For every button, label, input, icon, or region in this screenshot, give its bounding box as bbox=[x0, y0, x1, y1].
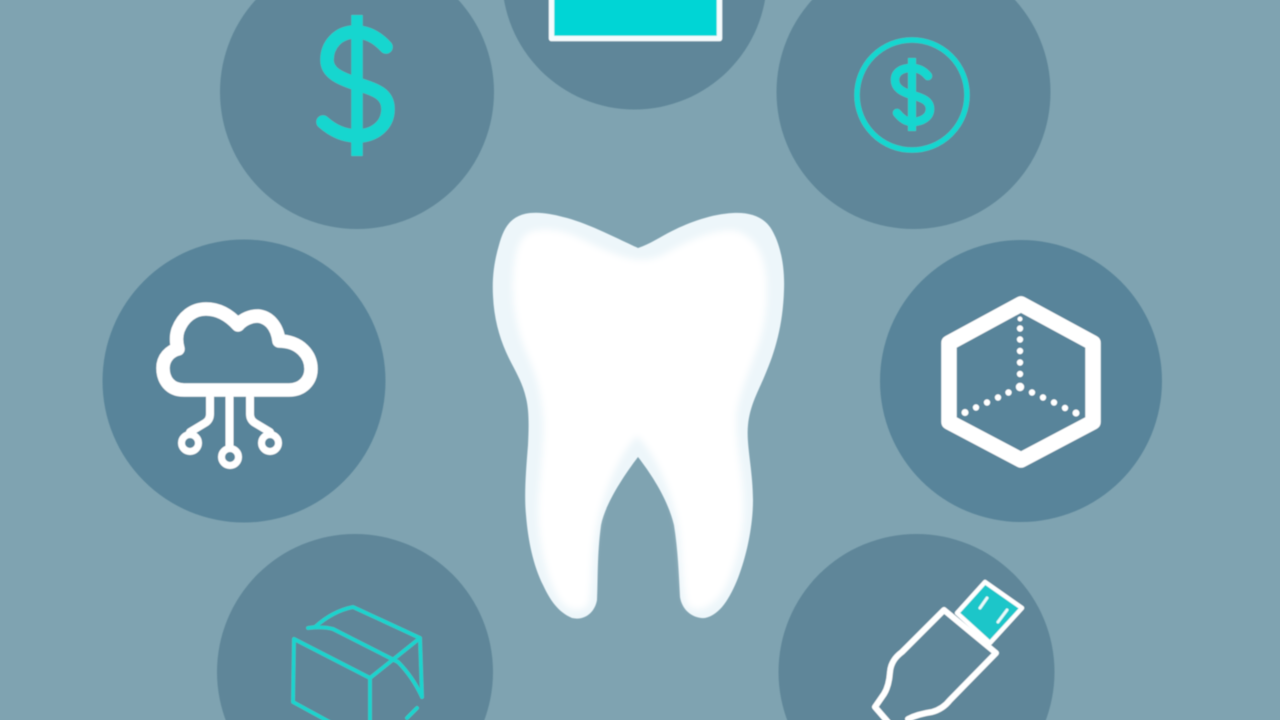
icon: USB connector tip bbox=[957, 582, 1022, 643]
icon circle: bottom right, USB plug bbox=[778, 534, 1054, 720]
icon: USB body bbox=[875, 610, 996, 720]
tooth inner highlight bbox=[513, 230, 767, 610]
icon: network lines bbox=[190, 392, 270, 448]
icon circle: top left, dollar sign bbox=[220, 0, 494, 229]
icon: cloud outline bbox=[163, 309, 311, 390]
icon circle: top centre, teal rectangle bbox=[502, 0, 767, 110]
icon circle: top right, dollar coin bbox=[776, 0, 1050, 229]
tooth bbox=[493, 213, 784, 619]
icon circle: bottom left, open box bbox=[217, 534, 493, 720]
icon circle: left, cloud network bbox=[102, 240, 386, 522]
tooth outer shade bbox=[493, 213, 784, 619]
icon circle: right, 3D hexagon bbox=[880, 240, 1162, 522]
